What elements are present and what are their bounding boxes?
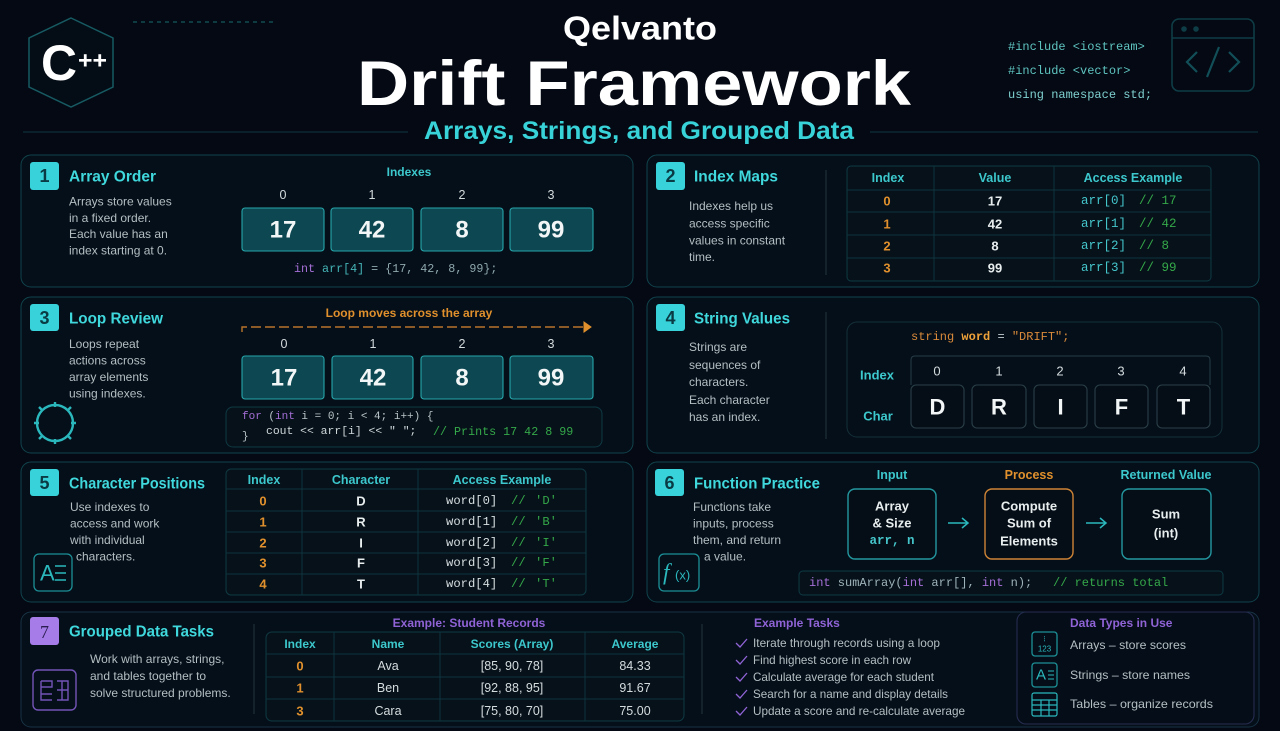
array diagram: Indexes [387,165,432,179]
table: student records [266,616,684,721]
heading: Array Order [69,168,156,186]
subtitle: Arrays, Strings, and Grouped Data [424,117,855,145]
flow: returned value: Sum [1152,506,1180,522]
description: Each character [689,393,770,407]
icon: arrays: ⁝ [1043,634,1046,644]
table: index maps: 42 [988,216,1002,232]
description [689,199,786,264]
description: with individual [69,533,145,547]
code: for loop: for (int i = 0; i < 4; i++) { [242,411,433,423]
description: sequences of [689,358,761,372]
panel: data types: Arrays – store scores [1070,638,1186,652]
table: character positions: 'D' [535,494,557,508]
description: Each value has an [69,227,168,241]
table: index maps [847,166,1211,281]
table: character positions: 'F' [535,556,557,570]
description: access and work [70,516,160,530]
string diagram: R [991,394,1007,420]
table: character positions: Index [248,473,280,487]
table: character positions: D [356,494,366,508]
array diagram: 2 [459,337,466,351]
string diagram: T [1177,394,1191,420]
flow: process: Sum of [1007,516,1052,530]
code: function signature: int sumArray(int arr[], int n); [809,576,1032,590]
array diagram: 8 [455,364,469,392]
table: character positions: word[2] [446,536,497,550]
string diagram: string word = "DRIFT"; [911,330,1069,344]
icon: strings [1032,663,1057,687]
description [69,337,148,400]
code: for loop: cout << arr[i] << " "; [266,426,416,438]
table: character positions: word[4] [446,577,497,591]
heading: Index Maps [694,168,778,186]
table: character positions: 'T' [535,577,557,591]
icon: C++ hexagon logo: ++ [78,48,107,74]
panel: 1 Array Order [21,155,633,287]
panel: 7 Grouped Data Tasks [21,612,1259,727]
list: example tasks [736,616,965,718]
panel: data types: Tables – organize records [1070,697,1213,711]
arrow: loop direction [242,306,591,332]
icon: grouped grid [33,670,76,710]
flow: input: Input [877,468,908,482]
description: Arrays store values [69,194,172,208]
heading: Function Practice [694,476,820,492]
table: student records: 84.33 [619,659,651,673]
badge 4 [656,304,685,331]
heading: Character Positions [69,476,205,492]
description: Loops repeat [69,337,140,351]
badge 2 [656,162,685,190]
table: student records: 75.00 [619,704,651,718]
list: example tasks: Calculate average for each student [753,670,935,684]
array diagram: 3 [548,337,555,351]
code: for loop [226,407,602,447]
description: characters. [689,375,748,389]
icon: code window [1172,19,1254,91]
panel: 3 Loop Review [21,297,633,453]
icon: f(x) [659,554,699,591]
string diagram: 4 [1179,364,1187,378]
table: index maps: arr[1] [1081,217,1126,231]
header [23,10,1258,145]
table: student records: 3 [296,704,304,718]
badge 1: 1 [39,166,50,186]
description [69,194,172,258]
table: index maps: // 99 [1139,261,1177,275]
table: student records: 91.67 [619,681,651,695]
table: index maps: // 17 [1139,194,1177,208]
string diagram: I [1057,394,1064,420]
flow: input: Array [875,498,910,514]
icon: tables [1032,693,1057,716]
description: time. [689,250,715,264]
array diagram: 1 [370,337,377,351]
table: student records: 0 [296,658,304,674]
table: index maps: Value [979,171,1011,185]
array diagram: 42 [359,216,385,244]
code: array declaration: int arr[4] = {17, 42, 8, 99}; [294,262,497,276]
array diagram: 99 [538,364,564,392]
icon: arrays [1032,632,1057,656]
table: index maps: 99 [988,260,1002,276]
flow: returned value: Returned Value [1120,468,1212,482]
table: index maps: arr[2] [1081,239,1126,253]
array diagram: 8 [455,216,469,244]
icon: f(x): (x) [675,568,690,582]
string diagram: Char [863,408,893,424]
list: example tasks: Update a score and re-calculate average [753,704,965,718]
description: array elements [69,370,148,384]
heading: Loop Review [69,310,164,328]
table: student records: Ben [377,681,399,695]
brand name: Qelvanto [563,10,717,46]
array diagram: 42 [360,364,386,392]
description: access specific [689,216,770,230]
table: student records: Scores (Array) [471,637,553,651]
badge 5: 5 [39,473,50,493]
list: example tasks: Find highest score in each row [753,653,911,667]
badge 3: 3 [39,308,50,328]
description: in a fixed order. [69,211,151,225]
list: example tasks: Iterate through records using a loop [753,636,940,650]
flow: process: Compute [1001,498,1057,514]
icon: text: A [40,560,55,586]
table: student records: Index [284,637,316,651]
table: character positions: // [511,494,526,508]
array diagram: 0 [281,337,288,351]
table: student records: Example: Student Records [393,616,546,630]
string diagram: 3 [1117,364,1125,378]
table: character positions: 4 [259,576,267,592]
string diagram: 0 [933,364,941,378]
description: actions across [69,354,146,368]
description: using indexes. [69,386,146,400]
table: character positions: 'B' [535,515,557,529]
description: Use indexes to [70,500,150,514]
description: inputs, process [693,516,774,530]
table: character positions: word[1] [446,515,497,529]
array diagram: 2 [459,188,466,202]
badge 3 [30,304,59,331]
description: Indexes help us [689,199,773,213]
badge 6: 6 [664,473,675,493]
array diagram: 99 [538,216,564,244]
table: index maps: 2 [883,238,891,254]
panel: 5 Character Positions [21,462,633,602]
badge 2: 2 [665,166,676,186]
table: index maps: arr[3] [1081,261,1126,275]
description [693,500,781,564]
heading: Grouped Data Tasks [69,624,214,640]
string diagram [847,322,1222,437]
code snippet: includes: using namespace std; [1008,88,1152,102]
table: index maps: 8 [991,238,999,254]
heading: String Values [694,310,790,328]
table: student records: Name [372,637,405,651]
arrow: loop direction: Loop moves across the array [326,306,493,320]
badge 5 [30,469,59,496]
table: student records: Average [612,637,659,651]
panel: 6 Function Practice [647,462,1259,602]
table: index maps: // 8 [1139,239,1169,253]
table: index maps: 3 [883,260,891,276]
string diagram: 2 [1056,364,1064,378]
description: solve structured problems. [90,686,231,700]
badge 4: 4 [665,308,676,328]
table: character positions: R [356,514,366,530]
description [69,500,160,564]
panel: 4 String Values [647,297,1259,453]
icon: f(x): f [663,560,673,584]
description [689,340,770,424]
flow: process [985,468,1073,559]
table: student records: Cara [374,704,402,718]
table: character positions: 1 [259,514,267,530]
table: character positions: // [511,556,526,570]
description: index starting at 0. [69,244,167,258]
table: character positions: F [357,556,365,570]
table: character positions: word[3] [446,556,497,570]
table: index maps: 0 [883,194,891,208]
badge 7: 7 [40,622,49,642]
table: character positions: // [511,515,526,529]
array diagram [242,165,593,251]
table: character positions: 'I' [535,536,557,550]
table: student records: Ava [377,659,399,673]
description: them, and return [693,533,781,547]
table: character positions: // [511,577,526,591]
string diagram: 1 [995,364,1003,378]
code: for loop: } [242,431,249,443]
table: index maps: arr[0] [1081,194,1126,208]
icon: text [34,554,72,591]
string diagram: F [1115,394,1128,420]
panel: 2 Index Maps [647,155,1259,287]
icon: C++ hexagon logo [29,18,113,107]
description [90,652,231,700]
description: characters. [76,550,135,564]
list: example tasks: Example Tasks [754,616,840,630]
flow: input [848,468,936,559]
table: character positions: T [357,576,365,592]
description: Strings are [689,340,747,354]
code snippet: includes: #include <vector> [1008,64,1130,78]
description: has an index. [689,410,760,424]
table: student records: [85, 90, 78] [481,659,543,673]
array diagram: 0 [280,188,287,202]
code: function signature [799,571,1223,595]
icon: loop circle [34,402,76,444]
table: index maps: Index [872,171,904,185]
table: student records: [75, 80, 70] [481,704,543,718]
icon: C++ hexagon logo: C [41,35,77,91]
table: index maps: 17 [988,194,1002,208]
table: index maps: 1 [883,216,891,232]
table: character positions: 3 [259,556,267,570]
flow: process: Process [1005,468,1053,482]
badge 1 [30,162,59,190]
icon: arrays: 123 [1038,644,1052,654]
array diagram: 1 [369,188,376,202]
code snippet: includes: #include <iostream> [1008,40,1145,54]
table: character positions: word[0] [446,494,497,508]
flow: returned value: (int) [1154,526,1178,540]
table: character positions: Access Example [453,473,551,487]
table: index maps: // 42 [1139,217,1177,231]
flow: process: Elements [1000,534,1058,548]
title: Drift Framework [357,49,912,119]
table: character positions: 0 [259,494,267,508]
code: for loop: // Prints 17 42 8 99 [433,425,573,439]
flow: input: & Size [872,516,912,530]
flow: input: arr, n [869,534,915,548]
array diagram: 3 [548,188,555,202]
badge 6 [655,469,684,496]
array diagram [242,337,593,399]
table: index maps: Access Example [1084,171,1182,185]
description: a value. [704,550,746,564]
string diagram: D [930,394,945,420]
description: Work with arrays, strings, [90,652,224,666]
table: student records: [92, 88, 95] [481,681,543,695]
description: Functions take [693,500,771,514]
table: character positions: Character [332,473,390,487]
panel: data types: Strings – store names [1070,668,1190,682]
code snippet: includes [1008,40,1152,102]
arrow: process to returned value [1086,518,1106,528]
badge 7 [30,617,59,645]
table: student records: 1 [296,680,304,696]
header rules [23,131,1258,133]
string diagram: Index [860,368,895,382]
description: and tables together to [90,669,206,683]
table: character positions: // [511,536,526,550]
panel: data types: Data Types in Use [1070,616,1173,630]
list: example tasks: Search for a name and display details [753,687,948,701]
code: function signature: // returns total [1053,576,1168,590]
decorative dotted line [133,21,275,23]
arrow: input to process [948,518,968,528]
table: character positions: 2 [259,536,267,550]
flow: returned value [1120,468,1212,559]
table: character positions: I [359,536,363,550]
array diagram: 17 [271,364,297,392]
description: values in constant [689,234,786,248]
table: character positions [226,469,586,595]
array diagram: 17 [270,216,296,244]
icon: strings: A [1036,666,1046,684]
panel: data types [1017,612,1254,724]
